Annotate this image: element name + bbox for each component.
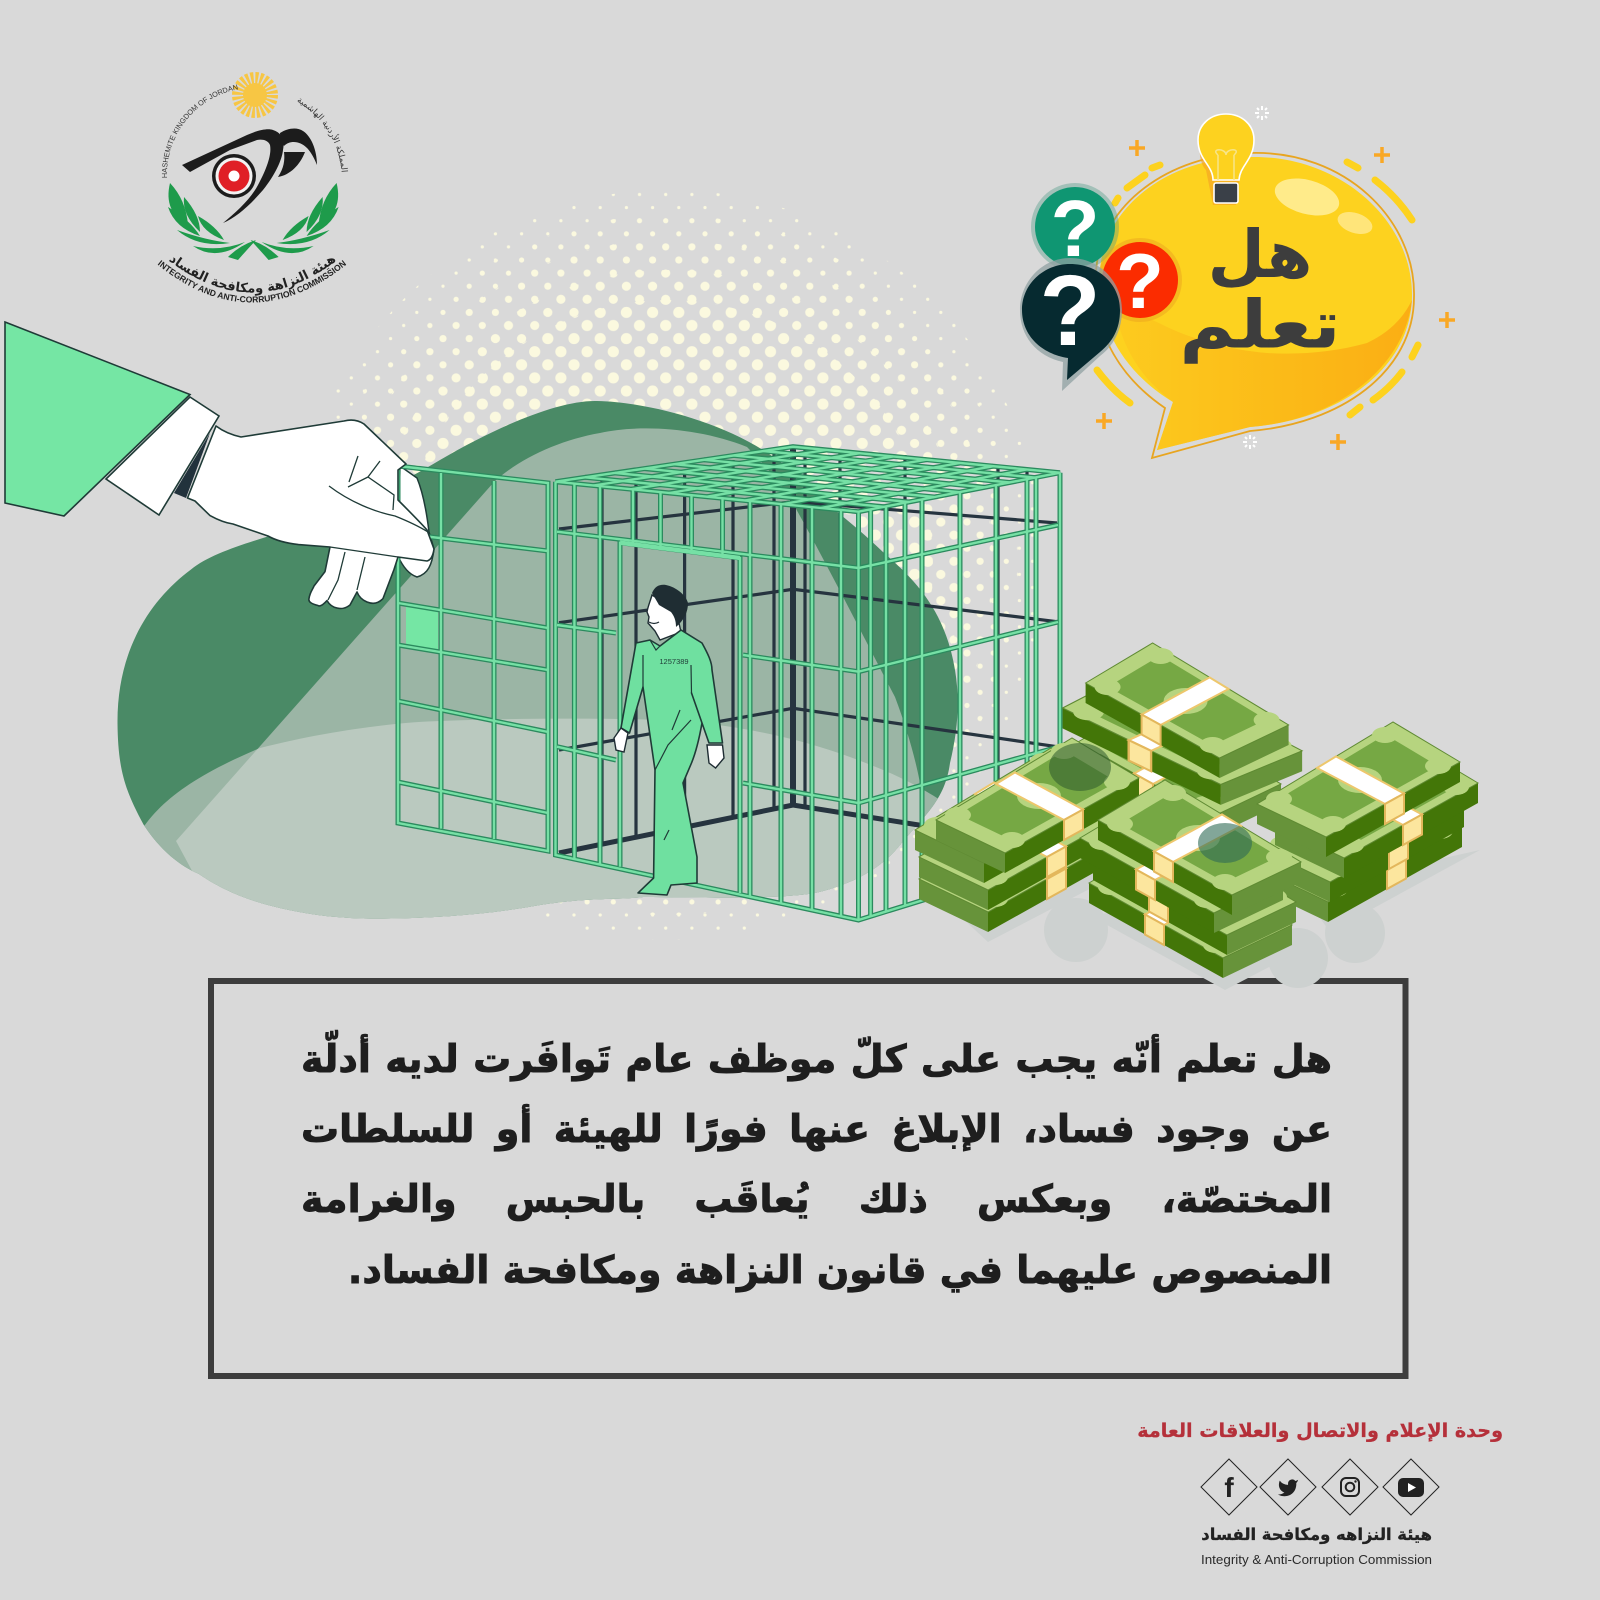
social icons xyxy=(1201,1459,1439,1515)
decorative dashes xyxy=(1097,162,1418,415)
hand with sleeve xyxy=(5,322,434,609)
stacks of money xyxy=(915,643,1478,978)
red question bubble xyxy=(1098,237,1182,325)
bubble lower shade xyxy=(1113,300,1412,450)
arc text commission arabic xyxy=(140,235,365,292)
hand xyxy=(188,420,434,609)
halftone dot background xyxy=(293,190,1043,940)
back stack xyxy=(1063,643,1302,837)
hair xyxy=(652,585,688,627)
laurel wreath xyxy=(168,183,339,260)
icon: twitter xyxy=(1260,1459,1316,1515)
prison cage xyxy=(556,447,1060,920)
sun emblem xyxy=(239,79,271,111)
green blob with light beam and floor xyxy=(118,401,958,919)
dark question bubble: ? xyxy=(1039,255,1101,367)
text line three: المختصّة، وبعكس ذلك يُعاقَب بالحبس والغرامة xyxy=(301,1177,1332,1221)
heading word one: هل xyxy=(1208,216,1312,293)
eye target xyxy=(212,154,256,198)
cuff shadow xyxy=(174,433,210,498)
footer commission arabic name: هيئة النزاهه ومكافحة الفساد xyxy=(1201,1525,1432,1545)
money shadows xyxy=(921,850,1480,990)
icon: facebook xyxy=(1201,1459,1257,1515)
main text block xyxy=(301,1030,1332,1293)
footer commission english name: Integrity & Anti-Corruption Commission xyxy=(1201,1552,1432,1567)
face xyxy=(647,595,681,640)
commission logo: HASHEMITE KINGDOM OF JORDAN xyxy=(162,84,238,178)
front stack xyxy=(1080,780,1301,978)
speech bubble heading xyxy=(1020,106,1455,458)
commission logo: المملكة الأردنية الهاشمية xyxy=(298,98,348,172)
icon: youtube xyxy=(1383,1459,1439,1515)
text line two: عن وجود فساد، الإبلاغ عنها فورًا للهيئة أو للسلطات xyxy=(301,1107,1332,1151)
left stack xyxy=(915,738,1139,932)
footer unit name: وحدة الإعلام والاتصال والعلاقات العامة xyxy=(1137,1419,1503,1442)
sparkles xyxy=(1243,106,1269,449)
text frame xyxy=(211,981,1406,1376)
leg shadow xyxy=(681,780,697,857)
plus signs xyxy=(1096,140,1455,450)
open cage door xyxy=(398,466,548,851)
green question bubble: ? xyxy=(1051,184,1099,273)
sleeve xyxy=(5,322,190,516)
bubble body xyxy=(1099,157,1412,450)
arc text arabic right xyxy=(290,98,342,180)
commission logo xyxy=(158,72,348,302)
green question bubble xyxy=(1031,183,1119,273)
right stack xyxy=(1257,722,1478,922)
dark question bubble xyxy=(1020,255,1122,391)
cuff xyxy=(106,397,219,515)
arc text commission english xyxy=(158,265,346,302)
arc text english left xyxy=(167,89,240,178)
bubble outline xyxy=(1095,153,1414,458)
highlights xyxy=(1271,172,1343,222)
commission logo: INTEGRITY AND ANTI-CORRUPTION COMMISSION xyxy=(158,260,346,302)
falcon head xyxy=(182,129,317,223)
hands xyxy=(614,728,724,768)
icon: instagram xyxy=(1322,1459,1378,1515)
heading word two: تعلم xyxy=(1179,286,1341,365)
prisoner walking xyxy=(614,585,724,895)
icon: facebook: f xyxy=(1224,1472,1234,1503)
prisoner number: 1257389 xyxy=(659,657,689,666)
red question bubble: ? xyxy=(1116,237,1164,325)
light bulb xyxy=(1198,114,1254,205)
text line four: المنصوص عليهما في قانون النزاهة ومكافحة الفساد. xyxy=(348,1248,1332,1292)
jumpsuit xyxy=(621,630,722,895)
commission logo: هيئة النزاهة ومكافحة الفساد xyxy=(169,256,336,296)
text line one: هل تعلم أنّه يجب على كلّ موظف عام تَوافَرت لديه أدلّة xyxy=(301,1037,1332,1081)
thumb behind the door xyxy=(398,466,434,577)
